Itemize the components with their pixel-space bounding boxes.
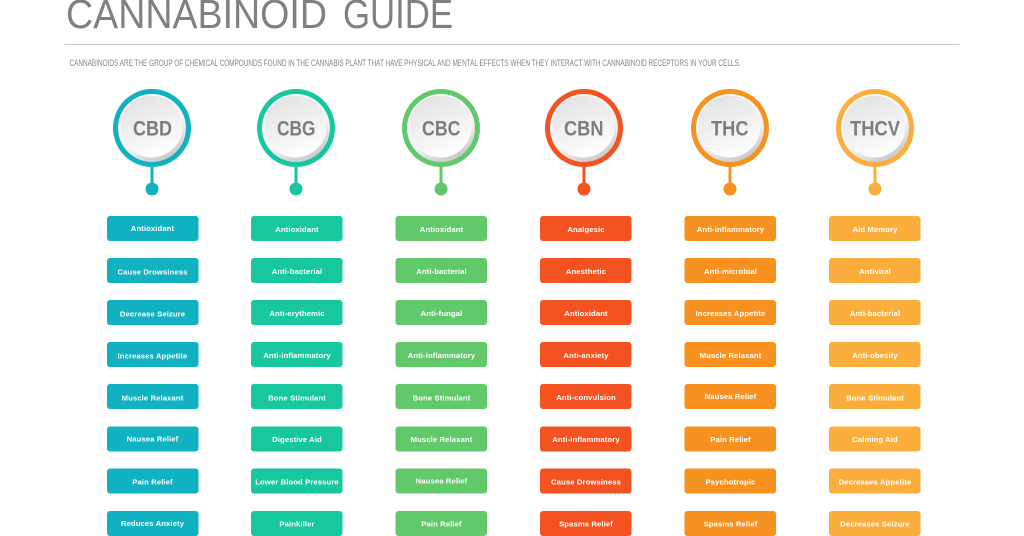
column: CBN xyxy=(540,89,632,536)
tags: CBD: Cause Drowsiness xyxy=(118,268,187,276)
tags: THCV: Decreases Appetite xyxy=(839,478,912,486)
badge: CBN xyxy=(545,89,623,196)
tags: CBN: Anti-inflammatory xyxy=(552,435,620,444)
badge: THCV xyxy=(836,89,914,196)
tags: CBN: Anti-anxiety xyxy=(563,351,609,360)
tags: THC: Anti-inflammatory xyxy=(697,225,765,234)
tags: CBD: Reduces Anxiety xyxy=(121,519,185,528)
tags: CBG: Digestive Aid xyxy=(272,435,322,444)
intro text: CANNABINOIDS ARE THE GROUP OF CHEMICAL COMPOUNDS FOUND IN THE CANNABIS PLANT THAT HAVE PHYSICAL AND MENTAL EFFECTS WHEN THEY INTERACT WITH CANNABINOID RECEPTORS IN YOUR CELLS. xyxy=(70,58,740,68)
tags: CBC: Nausea Relief xyxy=(416,476,468,486)
tags: CBC: Pain Relief xyxy=(421,520,462,528)
badge: CBC: CBC xyxy=(422,118,460,140)
tags: CBC: Bone Stimulant xyxy=(413,394,471,402)
badge: THC xyxy=(691,89,769,196)
tags: CBN: Analgesic xyxy=(567,225,605,234)
badge: CBG: CBG xyxy=(277,118,316,140)
tags: CBC: Muscle Relaxant xyxy=(411,435,473,444)
tags: THC: Nausea Relief xyxy=(705,392,757,401)
tags: THC: Increases Appetite xyxy=(696,309,766,318)
tags: THC: Pain Relief xyxy=(710,435,751,444)
column: CBD xyxy=(107,89,198,536)
column: CBC xyxy=(396,89,487,536)
tags: CBD: Antioxidant xyxy=(131,224,175,233)
badge: CBD xyxy=(113,89,191,196)
badge: CBD: CBD xyxy=(133,118,172,140)
column: THCV xyxy=(829,89,920,536)
tags: CBG: Painkiller xyxy=(279,520,315,528)
tags: CBC: Anti-inflammatory xyxy=(408,351,476,360)
column: THC xyxy=(684,89,776,536)
tags: CBC: Anti-bacterial xyxy=(416,267,467,276)
tags: THCV: Calming Aid xyxy=(852,435,898,444)
tags: THC: Muscle Relaxant xyxy=(700,351,762,360)
tags: THCV: Bone Stimulant xyxy=(846,394,904,402)
tags: THC xyxy=(684,216,776,536)
tags: CBG xyxy=(251,216,342,536)
tags: CBN: Antioxidant xyxy=(564,309,608,318)
badge: CBG xyxy=(257,89,335,196)
tags: CBG: Lower Blood Pressure xyxy=(255,478,339,486)
tags: THCV: Anti-obesity xyxy=(852,351,898,360)
tags: CBD: Decrease Seizure xyxy=(120,310,186,318)
tags: CBD: Muscle Relaxant xyxy=(122,394,184,402)
tags: CBD: Pain Relief xyxy=(132,478,173,486)
tags: THCV: Decreases Seizure xyxy=(840,520,910,528)
tags: THCV: Aid Memory xyxy=(852,225,898,234)
tags: THCV: Anti-bacterial xyxy=(850,309,900,318)
tags: THC: Psychotropic xyxy=(706,478,756,486)
tags: CBG: Anti-inflammatory xyxy=(263,351,331,360)
badge: CBC xyxy=(402,89,480,196)
tags: CBG: Anti-bacterial xyxy=(272,267,322,276)
tags: CBG: Bone Stimulant xyxy=(268,394,326,402)
tags: CBD: Nausea Relief xyxy=(127,434,179,444)
tags: CBN: Cause Drowsiness xyxy=(551,478,621,486)
tags: CBD xyxy=(107,216,198,536)
tags: CBC: Anti-fungal xyxy=(421,309,462,318)
tags: THC: Spasms Relief xyxy=(704,520,758,528)
tags: CBN: Anesthetic xyxy=(566,267,607,276)
tags: THC: Anti-microbial xyxy=(704,267,757,276)
tags: CBD: Increases Appetite xyxy=(118,352,188,360)
badge: THC: THC xyxy=(711,118,748,140)
tags: CBN: Spasms Relief xyxy=(559,520,613,528)
tags: CBC: Antioxidant xyxy=(420,225,464,234)
badge: CBN: CBN xyxy=(564,118,604,140)
tags: CBN: Anti-convulsion xyxy=(556,393,616,402)
column: CBG xyxy=(251,89,342,536)
tags: CBN xyxy=(540,216,632,536)
tags: CBC xyxy=(396,216,487,536)
tags: CBG: Anti-erythemic xyxy=(269,309,325,318)
tags: THCV: Antiviral xyxy=(859,267,891,276)
tags: CBG: Antioxidant xyxy=(275,225,319,234)
badge: THCV: THCV xyxy=(850,118,900,140)
tags: THCV xyxy=(829,216,920,536)
